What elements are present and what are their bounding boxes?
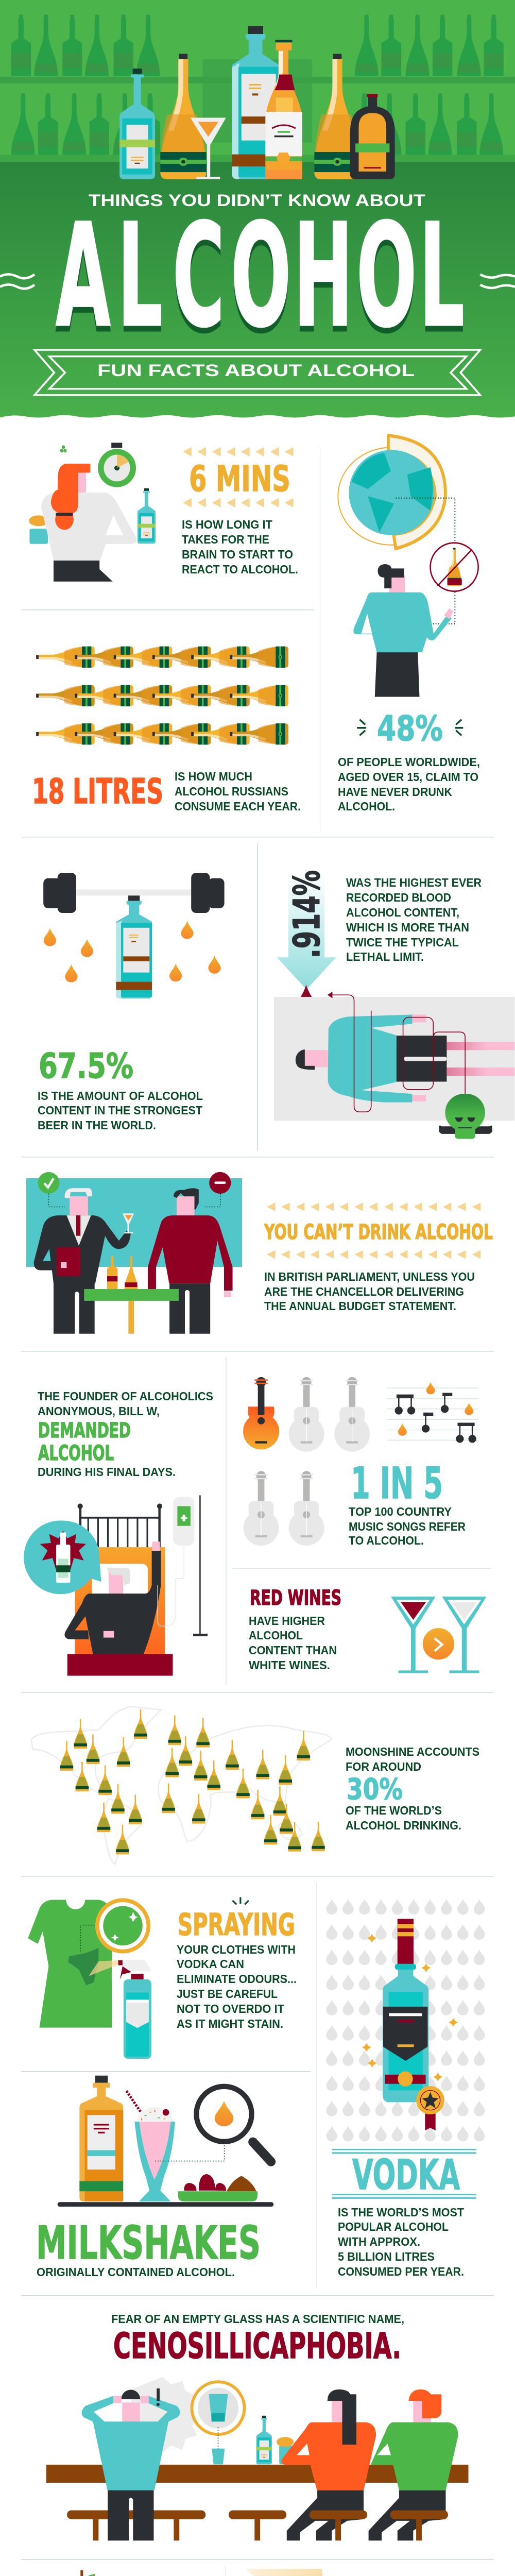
illustration: grapes and funnel <box>29 2570 217 2576</box>
text: blood alcohol content: WHICH IS MORE THAN <box>346 921 469 934</box>
panel: vodka <box>326 1899 490 2278</box>
rules above and below heading <box>332 2149 476 2199</box>
illustration: champagne burst <box>236 2569 514 2576</box>
panel: country music <box>243 1377 478 1547</box>
panel: grapes <box>29 2570 217 2576</box>
text: most popular: IS THE WORLD’S MOST <box>338 2206 464 2219</box>
illustration: man in hospital bed <box>24 1495 208 1676</box>
wave edge of header <box>0 415 515 426</box>
text: founder: ANONYMOUS, BILL W, <box>38 1404 160 1418</box>
text: russians: ALCOHOL RUSSIANS <box>175 785 288 798</box>
panel: spraying <box>28 1890 297 2059</box>
text: brain reaction: TAKES FOR THE <box>182 533 269 546</box>
text: moonshine: 30% <box>347 1773 403 1806</box>
text: moonshine <box>346 1745 479 1832</box>
illustration: bar scene <box>46 2377 469 2540</box>
text: founder: ALCOHOL <box>38 1442 114 1465</box>
panel: 18 litres <box>32 647 301 813</box>
text: founder: THE FOUNDER OF ALCOHOLICS <box>38 1389 213 1403</box>
text: strongest beer: BEER IN THE WORLD. <box>38 1118 156 1132</box>
text: clothes with vodka: NOT TO OVERDO IT <box>177 2002 284 2015</box>
heading: spraying: SPRAYING <box>178 1907 295 1942</box>
subtitle ribbon <box>35 350 480 395</box>
panel: parliament <box>26 1172 493 1334</box>
text: blood alcohol content: TWICE THE TYPICAL <box>346 936 459 949</box>
illustration: wine glasses <box>391 1597 487 1673</box>
panel: moonshine <box>31 1707 479 1865</box>
text: moonshine: OF THE WORLD’S <box>346 1804 442 1817</box>
text: clothes with vodka: VODKA CAN <box>177 1957 244 1971</box>
text: most popular: 5 BILLION LITRES <box>338 2250 435 2263</box>
chart: world map of bottles <box>31 1707 332 1865</box>
text: blood alcohol content: RECORDED BLOOD <box>346 891 451 904</box>
text: british parliament: THE ANNUAL BUDGET STATEMENT. <box>264 1299 456 1313</box>
text: clothes with vodka: AS IT MIGHT STAIN. <box>177 2017 283 2030</box>
text: brain reaction: IS HOW LONG IT <box>182 518 272 531</box>
heading: red wines: RED WINES <box>250 1586 341 1610</box>
text: strongest beer: IS THE AMOUNT OF ALCOHOL <box>38 1089 203 1103</box>
text: country songs: MUSIC SONGS REFER <box>349 1520 466 1533</box>
text: blood alcohol content <box>346 876 482 963</box>
text: british parliament <box>264 1270 475 1313</box>
stat: 48 percent: 48% <box>377 708 443 749</box>
divider lines <box>21 447 494 2576</box>
text: brain reaction <box>182 518 298 576</box>
text: higher content: HAVE HIGHER <box>249 1614 325 1628</box>
illustration: five guitars <box>243 1377 370 1546</box>
subtitle text: FUN FACTS ABOUT ALCOHOL <box>97 361 415 380</box>
text: russians: CONSUME EACH YEAR. <box>175 800 301 813</box>
title small line: THINGS YOU DIDN’T KNOW ABOUT <box>89 191 426 210</box>
panel: bill w <box>24 1389 213 1676</box>
text: strongest beer <box>38 1089 203 1132</box>
text: never drunk: HAVE NEVER DRUNK <box>338 785 452 799</box>
illustration: woman with stopwatch and bottle <box>29 443 156 582</box>
header panel <box>0 0 515 420</box>
text: blood alcohol content: LETHAL LIMIT. <box>346 950 424 963</box>
text: clothes with vodka: YOUR CLOTHES WITH <box>177 1943 296 1956</box>
text: never drunk: OF PEOPLE WORLDWIDE, <box>338 755 480 769</box>
panel: red wines <box>249 1586 487 1673</box>
text: most popular: CONSUMED PER YEAR. <box>338 2265 464 2278</box>
text: originally contained: ORIGINALLY CONTAINED ALCOHOL. <box>37 2265 235 2279</box>
panel: 48 percent <box>338 435 480 813</box>
text: brain reaction: REACT TO ALCOHOL. <box>182 563 298 576</box>
text: higher content <box>249 1614 337 1672</box>
arrow row top <box>267 1202 480 1211</box>
text: founder: DEMANDED <box>38 1419 131 1443</box>
text: moonshine: ALCOHOL DRINKING. <box>346 1819 461 1832</box>
illustration: shirt and spray bottle <box>28 1890 249 2059</box>
text: country songs <box>349 1505 466 1547</box>
text: russians: IS HOW MUCH <box>175 770 252 783</box>
arrow with blood drop <box>277 874 336 1027</box>
text: brain reaction: BRAIN TO START TO <box>182 548 293 561</box>
text: never drunk <box>338 755 480 813</box>
stat: .914 percent rotated: .914% <box>286 870 328 958</box>
text: moonshine: FOR AROUND <box>346 1760 421 1773</box>
text: blood alcohol content: ALCOHOL CONTENT, <box>346 906 459 919</box>
text: never drunk: ALCOHOL. <box>338 800 395 813</box>
text: most popular: POPULAR ALCOHOL <box>338 2220 449 2233</box>
text: british parliament: IN BRITISH PARLIAMENT, UNLESS YOU <box>264 1270 475 1283</box>
text: country songs: TOP 100 COUNTRY <box>349 1505 452 1518</box>
panel: 67.5 percent <box>38 873 225 1132</box>
text: british parliament: ARE THE CHANCELLOR DELIVERING <box>264 1285 464 1298</box>
text: blood alcohol content: WAS THE HIGHEST EVER <box>346 876 482 889</box>
text: russians <box>175 770 301 813</box>
title ALCOHOL: ALCOHOL <box>56 193 465 359</box>
text: moonshine: MOONSHINE ACCOUNTS <box>346 1745 479 1758</box>
stat: 67.5 percent: 67.5% <box>39 1046 133 1086</box>
illustration: rows of bottles <box>36 647 288 744</box>
illustration: bottle, milkshake, magnifier <box>58 2076 273 2207</box>
text: most popular: WITH APPROX. <box>338 2235 420 2248</box>
text: higher content: ALCOHOL <box>249 1629 303 1642</box>
wavy side decorations <box>0 274 515 289</box>
panel: .914 percent <box>274 870 514 1139</box>
stat: 6 mins: 6 MINS <box>189 459 290 500</box>
illustration: two men at table <box>26 1172 242 1334</box>
stat: 18 litres: 18 LITRES <box>32 771 163 811</box>
panel: champagne pressure <box>236 2569 514 2576</box>
panel: milkshakes <box>36 2076 273 2279</box>
illustration: vodka bottle on drop pattern <box>326 1899 490 2151</box>
text: fear of empty glass: FEAR OF AN EMPTY GLASS HAS A SCIENTIFIC NAME, <box>111 2312 404 2326</box>
text: clothes with vodka: ELIMINATE ODOURS... <box>177 1972 297 1986</box>
text: clothes with vodka: JUST BE CAREFUL <box>177 1987 278 2001</box>
panel: 6 mins <box>29 443 298 582</box>
text: most popular <box>338 2206 464 2278</box>
icon: music staff <box>387 1382 478 1443</box>
illustration: barbell and bottle <box>43 873 225 998</box>
text: higher content: CONTENT THAN <box>249 1643 337 1657</box>
text: clothes with vodka <box>177 1943 297 2030</box>
text: strongest beer: CONTENT IN THE STRONGEST <box>38 1104 202 1117</box>
illustration: lying person and skull <box>274 992 514 1139</box>
text: founder: DURING HIS FINAL DAYS. <box>38 1465 176 1479</box>
heading: vodka: VODKA <box>352 2151 460 2199</box>
text: never drunk: AGED OVER 15, CLAIM TO <box>338 770 478 784</box>
panel: cenosillicaphobia <box>46 2312 469 2540</box>
stat: 1 in 5: 1 IN 5 <box>351 1458 443 1509</box>
text: higher content: WHITE WINES. <box>249 1658 330 1672</box>
feature bottles and martini <box>119 26 395 179</box>
arrow rows <box>183 447 294 507</box>
text: founder <box>38 1389 213 1479</box>
arrow row bottom <box>267 1250 480 1259</box>
bar shelves with bottles <box>0 0 515 420</box>
heading: milkshakes: MILKSHAKES <box>36 2216 261 2269</box>
illustration: globe and woman <box>338 435 478 736</box>
text: country songs: TO ALCOHOL. <box>349 1534 424 1547</box>
